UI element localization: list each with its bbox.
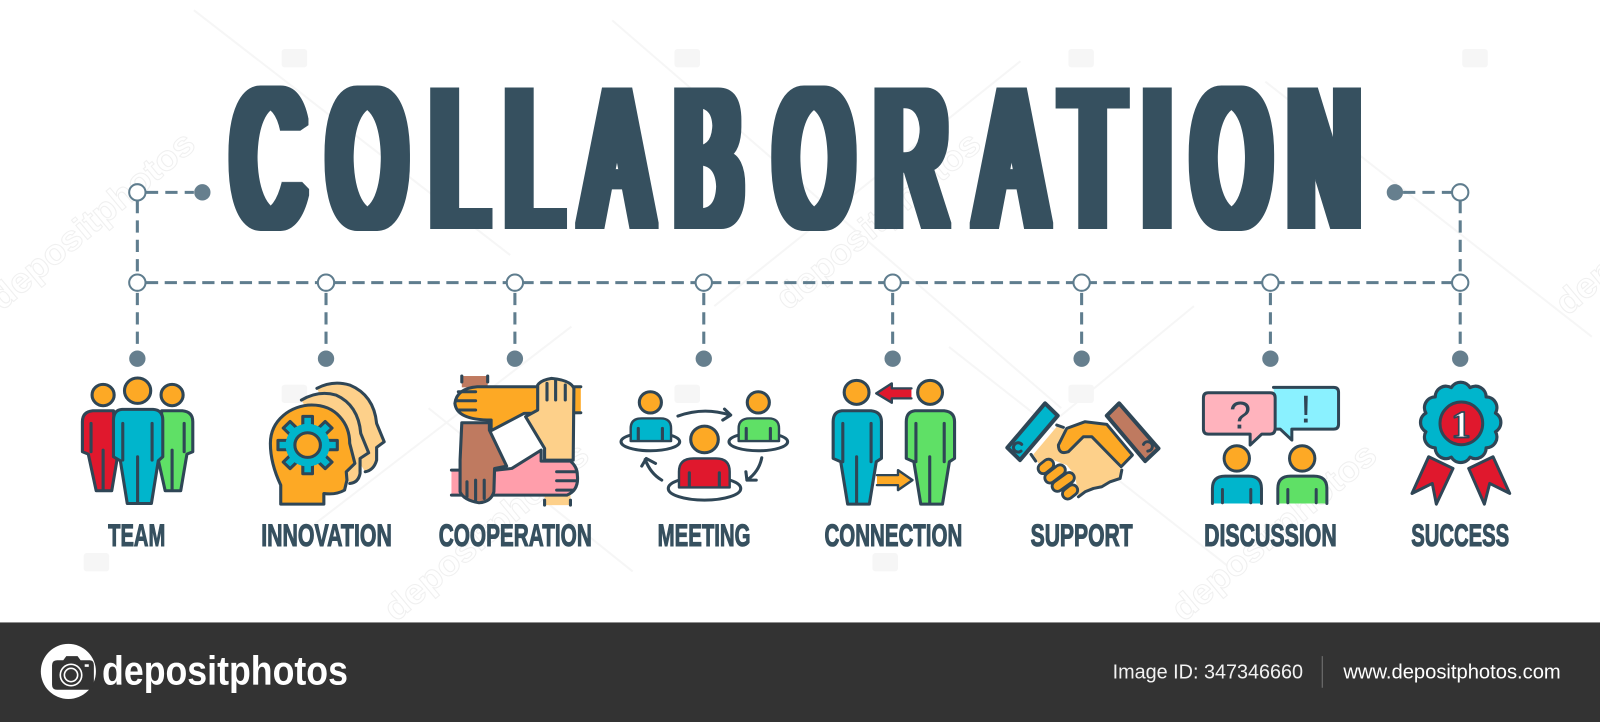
label: team: TEAM [108,517,165,553]
icon: discussion [1203,387,1339,503]
logo camera [41,644,96,699]
label: innovation: INNOVATION [261,517,392,553]
label: meeting: MEETING [658,517,751,553]
icon: discussion: ! [1300,388,1311,432]
icon: success medal: 1 [1451,402,1471,446]
watermark: depositphotos [377,435,596,629]
watermark: depositphotos [768,124,988,317]
icon: support handshake [1007,403,1158,497]
icon: innovation [270,383,384,504]
label: discussion: DISCUSSION [1204,517,1337,553]
footer banner [0,622,1600,722]
icon: connection [833,380,955,504]
title: COLLABORATION [234,48,1359,268]
image id: Image ID: 347346660 [1113,661,1303,683]
website: www.depositphotos.com [1342,661,1561,683]
label: support: SUPPORT [1031,517,1133,553]
connector lines [129,184,1468,367]
label: success: SUCCESS [1411,517,1509,553]
icon: cooperation [451,376,581,505]
icon: discussion: ? [1229,393,1251,437]
icon: meeting [621,392,788,500]
icon: success medal [1412,382,1510,504]
icon: team [82,378,193,503]
label: cooperation: COOPERATION [439,517,592,553]
label: connection: CONNECTION [824,517,962,553]
logo wordmark: depositphotos [102,648,348,694]
watermark: depositphotos [1164,435,1384,629]
